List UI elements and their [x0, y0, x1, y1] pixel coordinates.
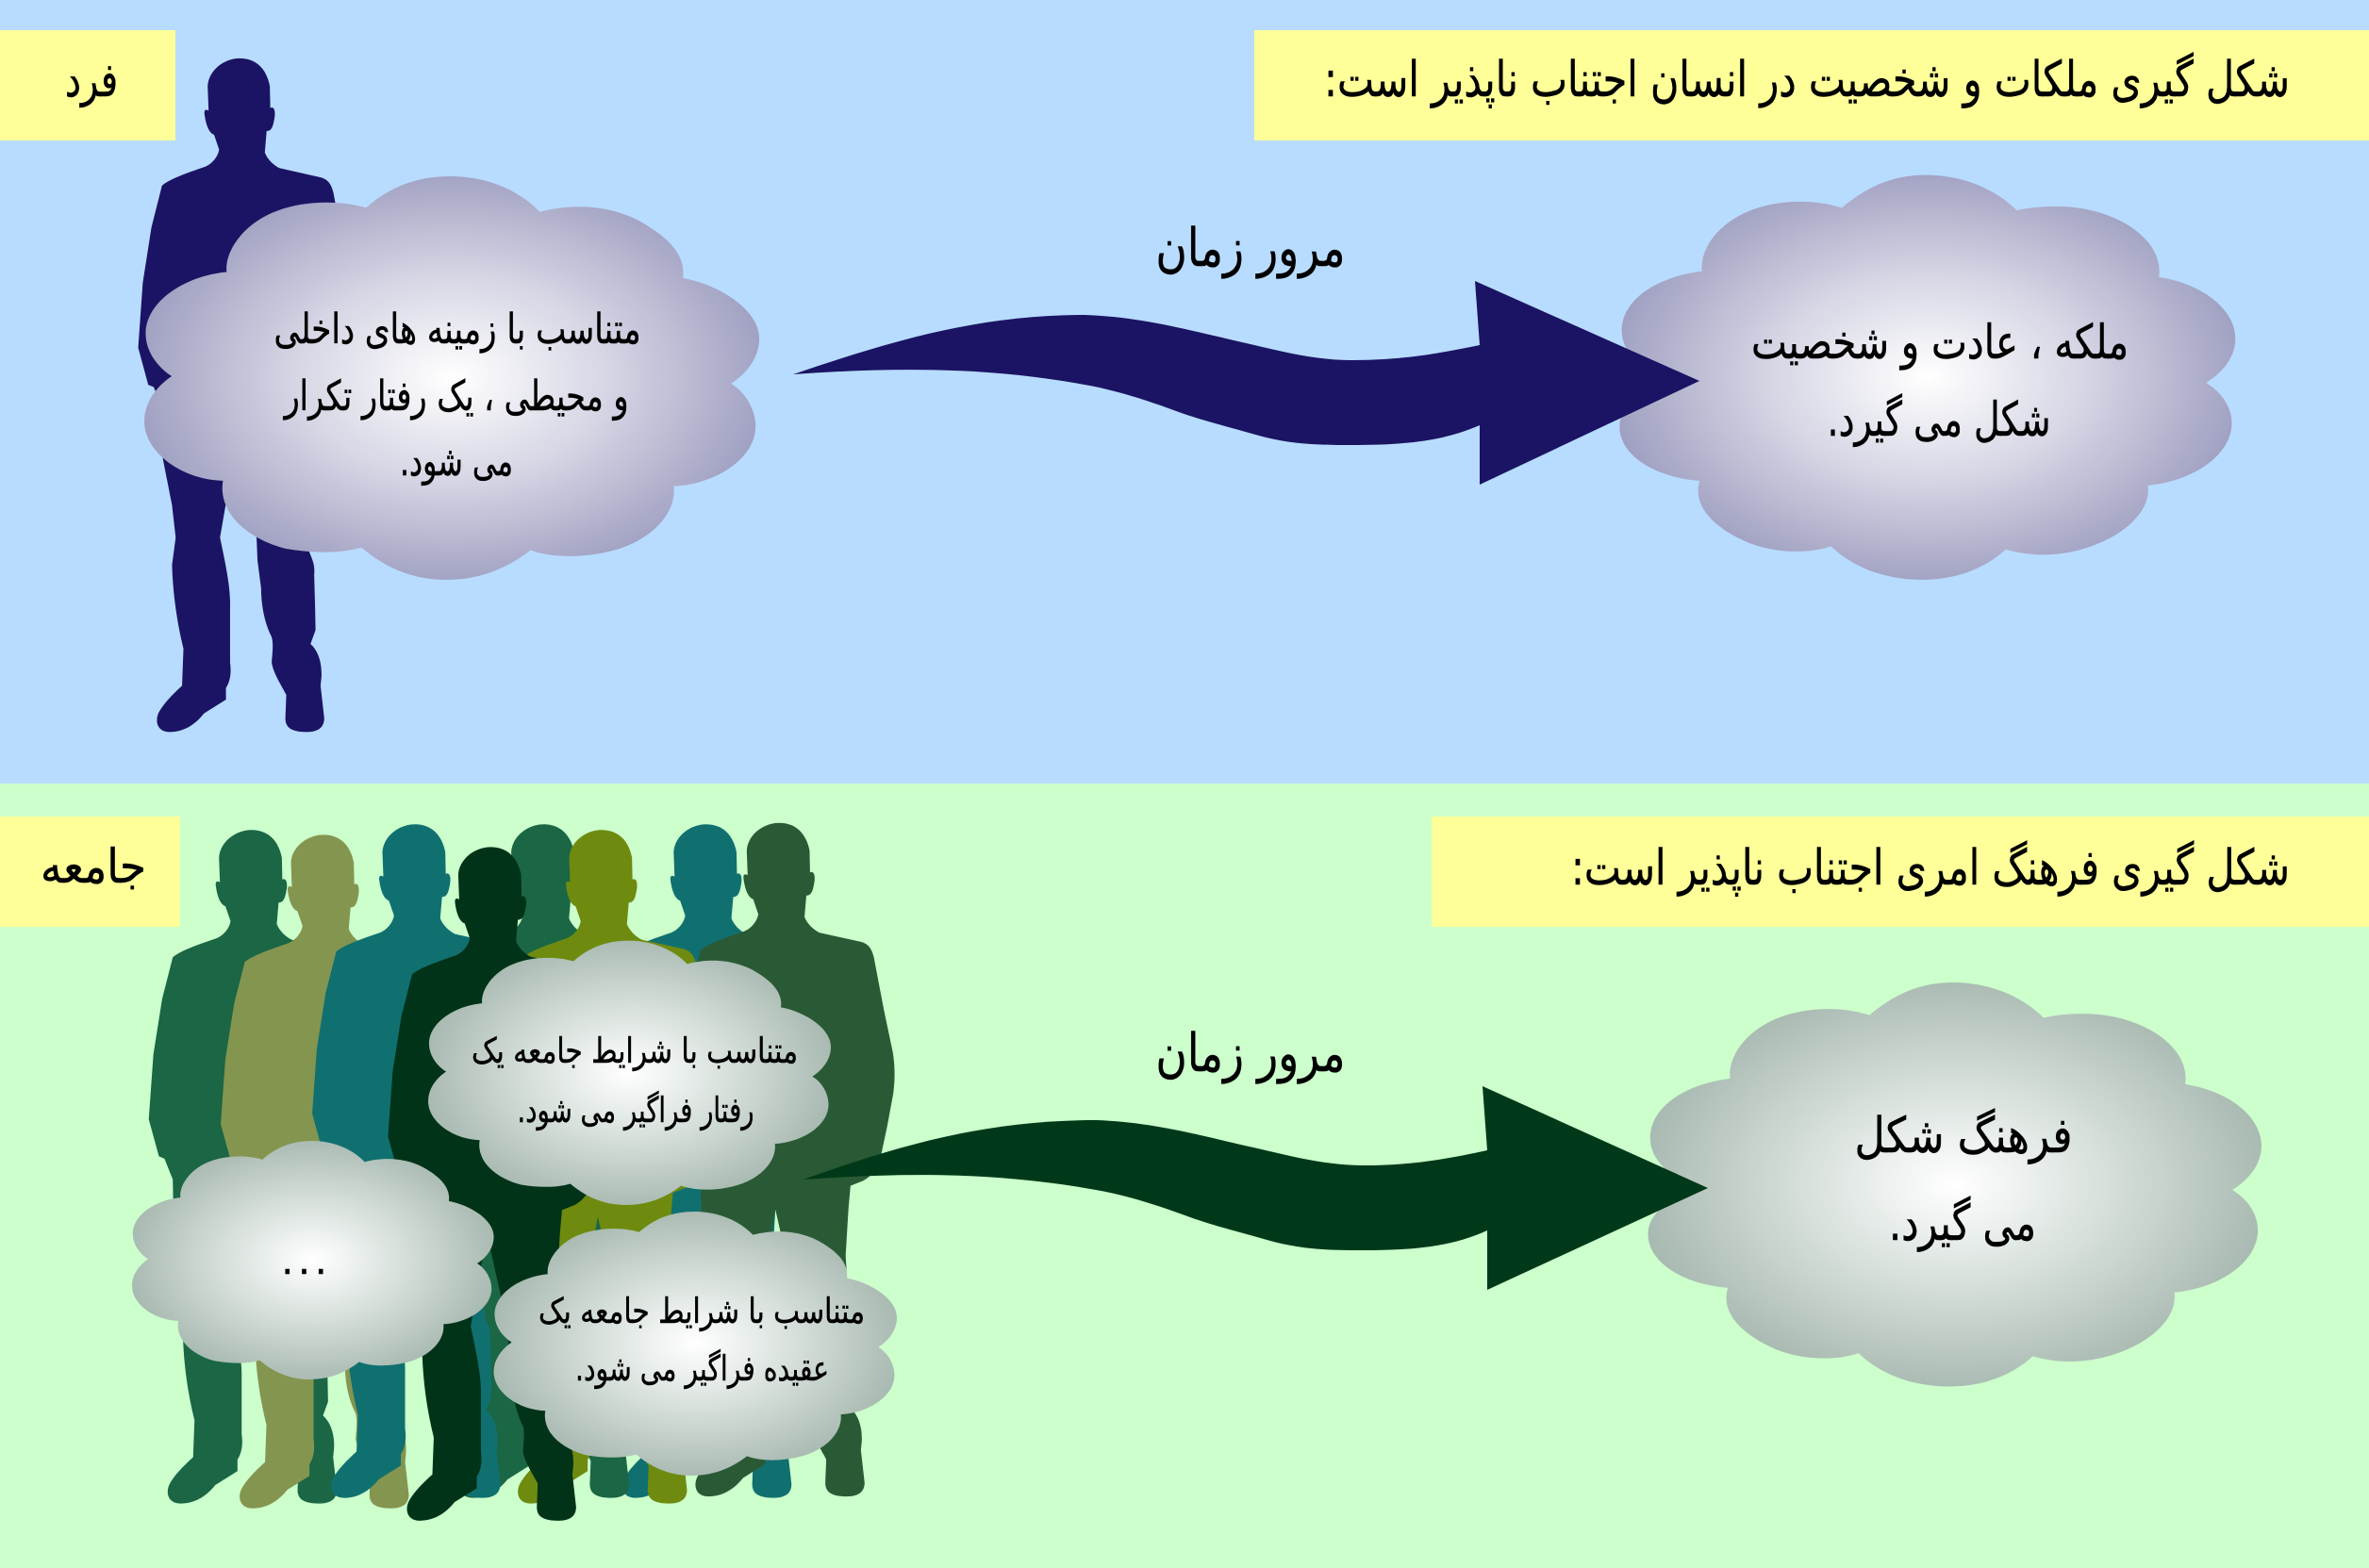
cloud: habit and personality	[1619, 175, 2235, 580]
label: individual: فرد	[65, 53, 118, 107]
cloud: belief in society: متناسب با شرایط جامعه یک	[538, 1291, 865, 1331]
label: individual	[0, 30, 175, 140]
cloud: habit and personality: شکل می گیرد.	[1828, 392, 2050, 447]
cloud: ellipsis	[132, 1141, 494, 1379]
caption: passage of time (bottom): مرور زمان	[1156, 1023, 1345, 1084]
cloud: culture takes shape: می گیرد.	[1889, 1196, 2036, 1252]
cloud: repeated behaviour: و محیطی ، یک رفتار تکرار	[283, 372, 628, 421]
cloud: repeated behaviour: متناسب با زمینه های داخلی	[273, 305, 641, 354]
arrow: society	[803, 1086, 1708, 1290]
panel: individual (blue background)	[0, 0, 2369, 784]
label: society: جامعه	[41, 839, 146, 894]
cloud: repeated behaviour	[144, 176, 759, 580]
heading: individual	[1254, 30, 2369, 140]
heading: society	[1432, 817, 2369, 927]
arrow: individual	[793, 281, 1699, 485]
cloud: culture takes shape	[1648, 982, 2261, 1387]
cloud: behaviour in society	[428, 941, 831, 1205]
caption: passage of time (top): مرور زمان	[1156, 218, 1345, 279]
panel: society (green background)	[0, 784, 2369, 1568]
label: society	[0, 817, 180, 927]
cloud: behaviour in society: رفتار فراگیر می شود.	[517, 1090, 754, 1131]
cloud: repeated behaviour: می شود.	[400, 437, 513, 486]
cloud: culture takes shape: فرهنگ شکل	[1854, 1108, 2073, 1164]
cloud: ellipsis: ...	[281, 1240, 332, 1283]
cloud: behaviour in society: متناسب با شرایط جامعه یک	[472, 1031, 798, 1071]
icon: man silhouette	[139, 58, 354, 732]
cloud: habit and personality: ملکه ، عادت و شخصیت	[1751, 315, 2129, 371]
cloud: belief in society: عقیده فراگیر می شود.	[575, 1348, 829, 1389]
icon: crowd of silhouettes	[149, 823, 895, 1521]
cloud: belief in society	[494, 1212, 897, 1476]
